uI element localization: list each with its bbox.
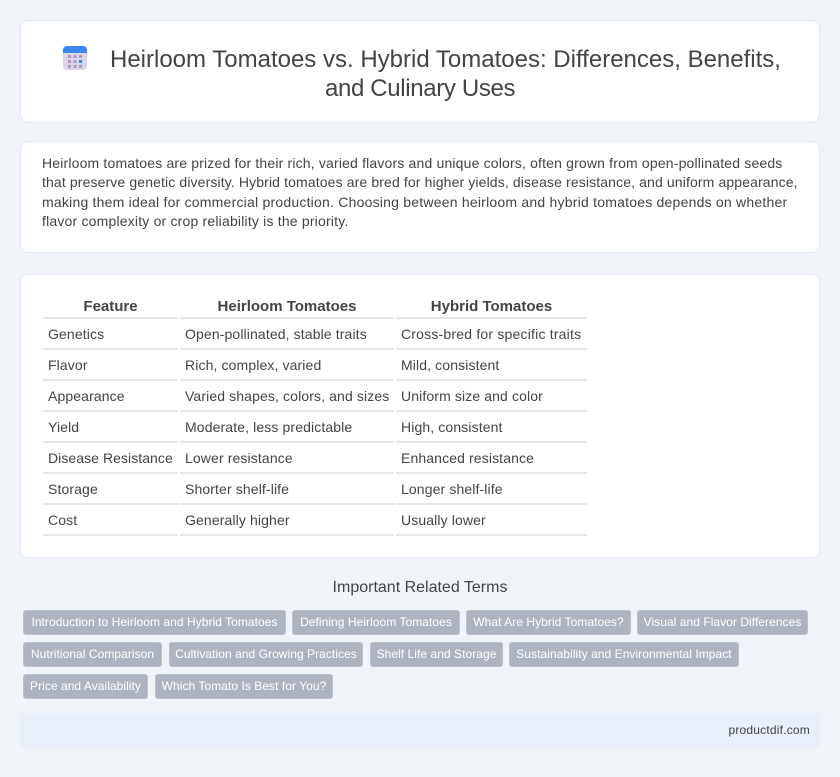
related term tags — [23, 610, 808, 699]
comparison table: Varied shapes, colors, and sizes — [185, 388, 389, 404]
comparison table: Appearance — [48, 388, 125, 404]
intro text: making them ideal for commercial production. Choosing between heirloom and hybrid tomatoes depends on whether — [42, 194, 787, 210]
related term tags: Visual and Flavor Differences — [644, 615, 801, 629]
intro text: that preserve genetic diversity. Hybrid tomatoes are bred for higher yields, disease resistance, and uniform appearance, — [42, 174, 798, 190]
comparison table: Feature — [83, 298, 138, 315]
comparison table: Heirloom Tomatoes — [218, 298, 356, 315]
comparison table: Open-pollinated, stable traits — [185, 326, 367, 342]
comparison table: Enhanced resistance — [401, 450, 534, 466]
comparison table: Usually lower — [401, 512, 486, 528]
related term tags: Sustainability and Environmental Impact — [516, 647, 732, 661]
comparison table: Yield — [48, 419, 79, 435]
comparison table: Longer shelf-life — [401, 481, 503, 497]
related term tags: What Are Hybrid Tomatoes? — [473, 615, 624, 629]
intro card — [20, 141, 820, 253]
title: and Culinary Uses — [325, 75, 515, 102]
comparison table: Genetics — [48, 326, 104, 342]
comparison table: Mild, consistent — [401, 357, 499, 373]
icon: calendar — [63, 46, 87, 70]
comparison table: Disease Resistance — [48, 450, 173, 466]
related term tags: Shelf Life and Storage — [377, 647, 496, 661]
comparison table — [43, 298, 587, 536]
comparison table: Flavor — [48, 357, 88, 373]
related term tags: Nutritional Comparison — [31, 647, 154, 661]
footer bar — [20, 713, 820, 747]
intro text — [42, 155, 798, 229]
title: Heirloom Tomatoes vs. Hybrid Tomatoes: Differences, Benefits, — [110, 46, 781, 73]
comparison table: Cost — [48, 512, 77, 528]
intro text: Heirloom tomatoes are prized for their rich, varied flavors and unique colors, often grown from open-pollinated seeds — [42, 155, 782, 171]
related terms heading: Important Related Terms — [333, 579, 507, 596]
comparison table: Storage — [48, 481, 98, 497]
footer source: productdif.com — [728, 723, 810, 737]
comparison table: Shorter shelf-life — [185, 481, 289, 497]
related term tags: Which Tomato Is Best for You? — [162, 679, 326, 693]
comparison table: Cross-bred for specific traits — [401, 326, 581, 342]
related term tags: Cultivation and Growing Practices — [175, 647, 357, 661]
title — [110, 46, 781, 102]
table card — [20, 274, 820, 558]
comparison table: Uniform size and color — [401, 388, 543, 404]
comparison table: Lower resistance — [185, 450, 293, 466]
comparison table: Hybrid Tomatoes — [431, 298, 552, 315]
header card — [20, 20, 820, 123]
related term tags: Defining Heirloom Tomatoes — [300, 615, 452, 629]
intro text: flavor complexity or crop reliability is the priority. — [42, 213, 348, 229]
comparison table: Generally higher — [185, 512, 290, 528]
comparison table: Moderate, less predictable — [185, 419, 352, 435]
related term tags: Price and Availability — [30, 679, 141, 693]
comparison table: Rich, complex, varied — [185, 357, 321, 373]
comparison table: High, consistent — [401, 419, 503, 435]
related term tags: Introduction to Heirloom and Hybrid Tomatoes — [31, 615, 278, 629]
